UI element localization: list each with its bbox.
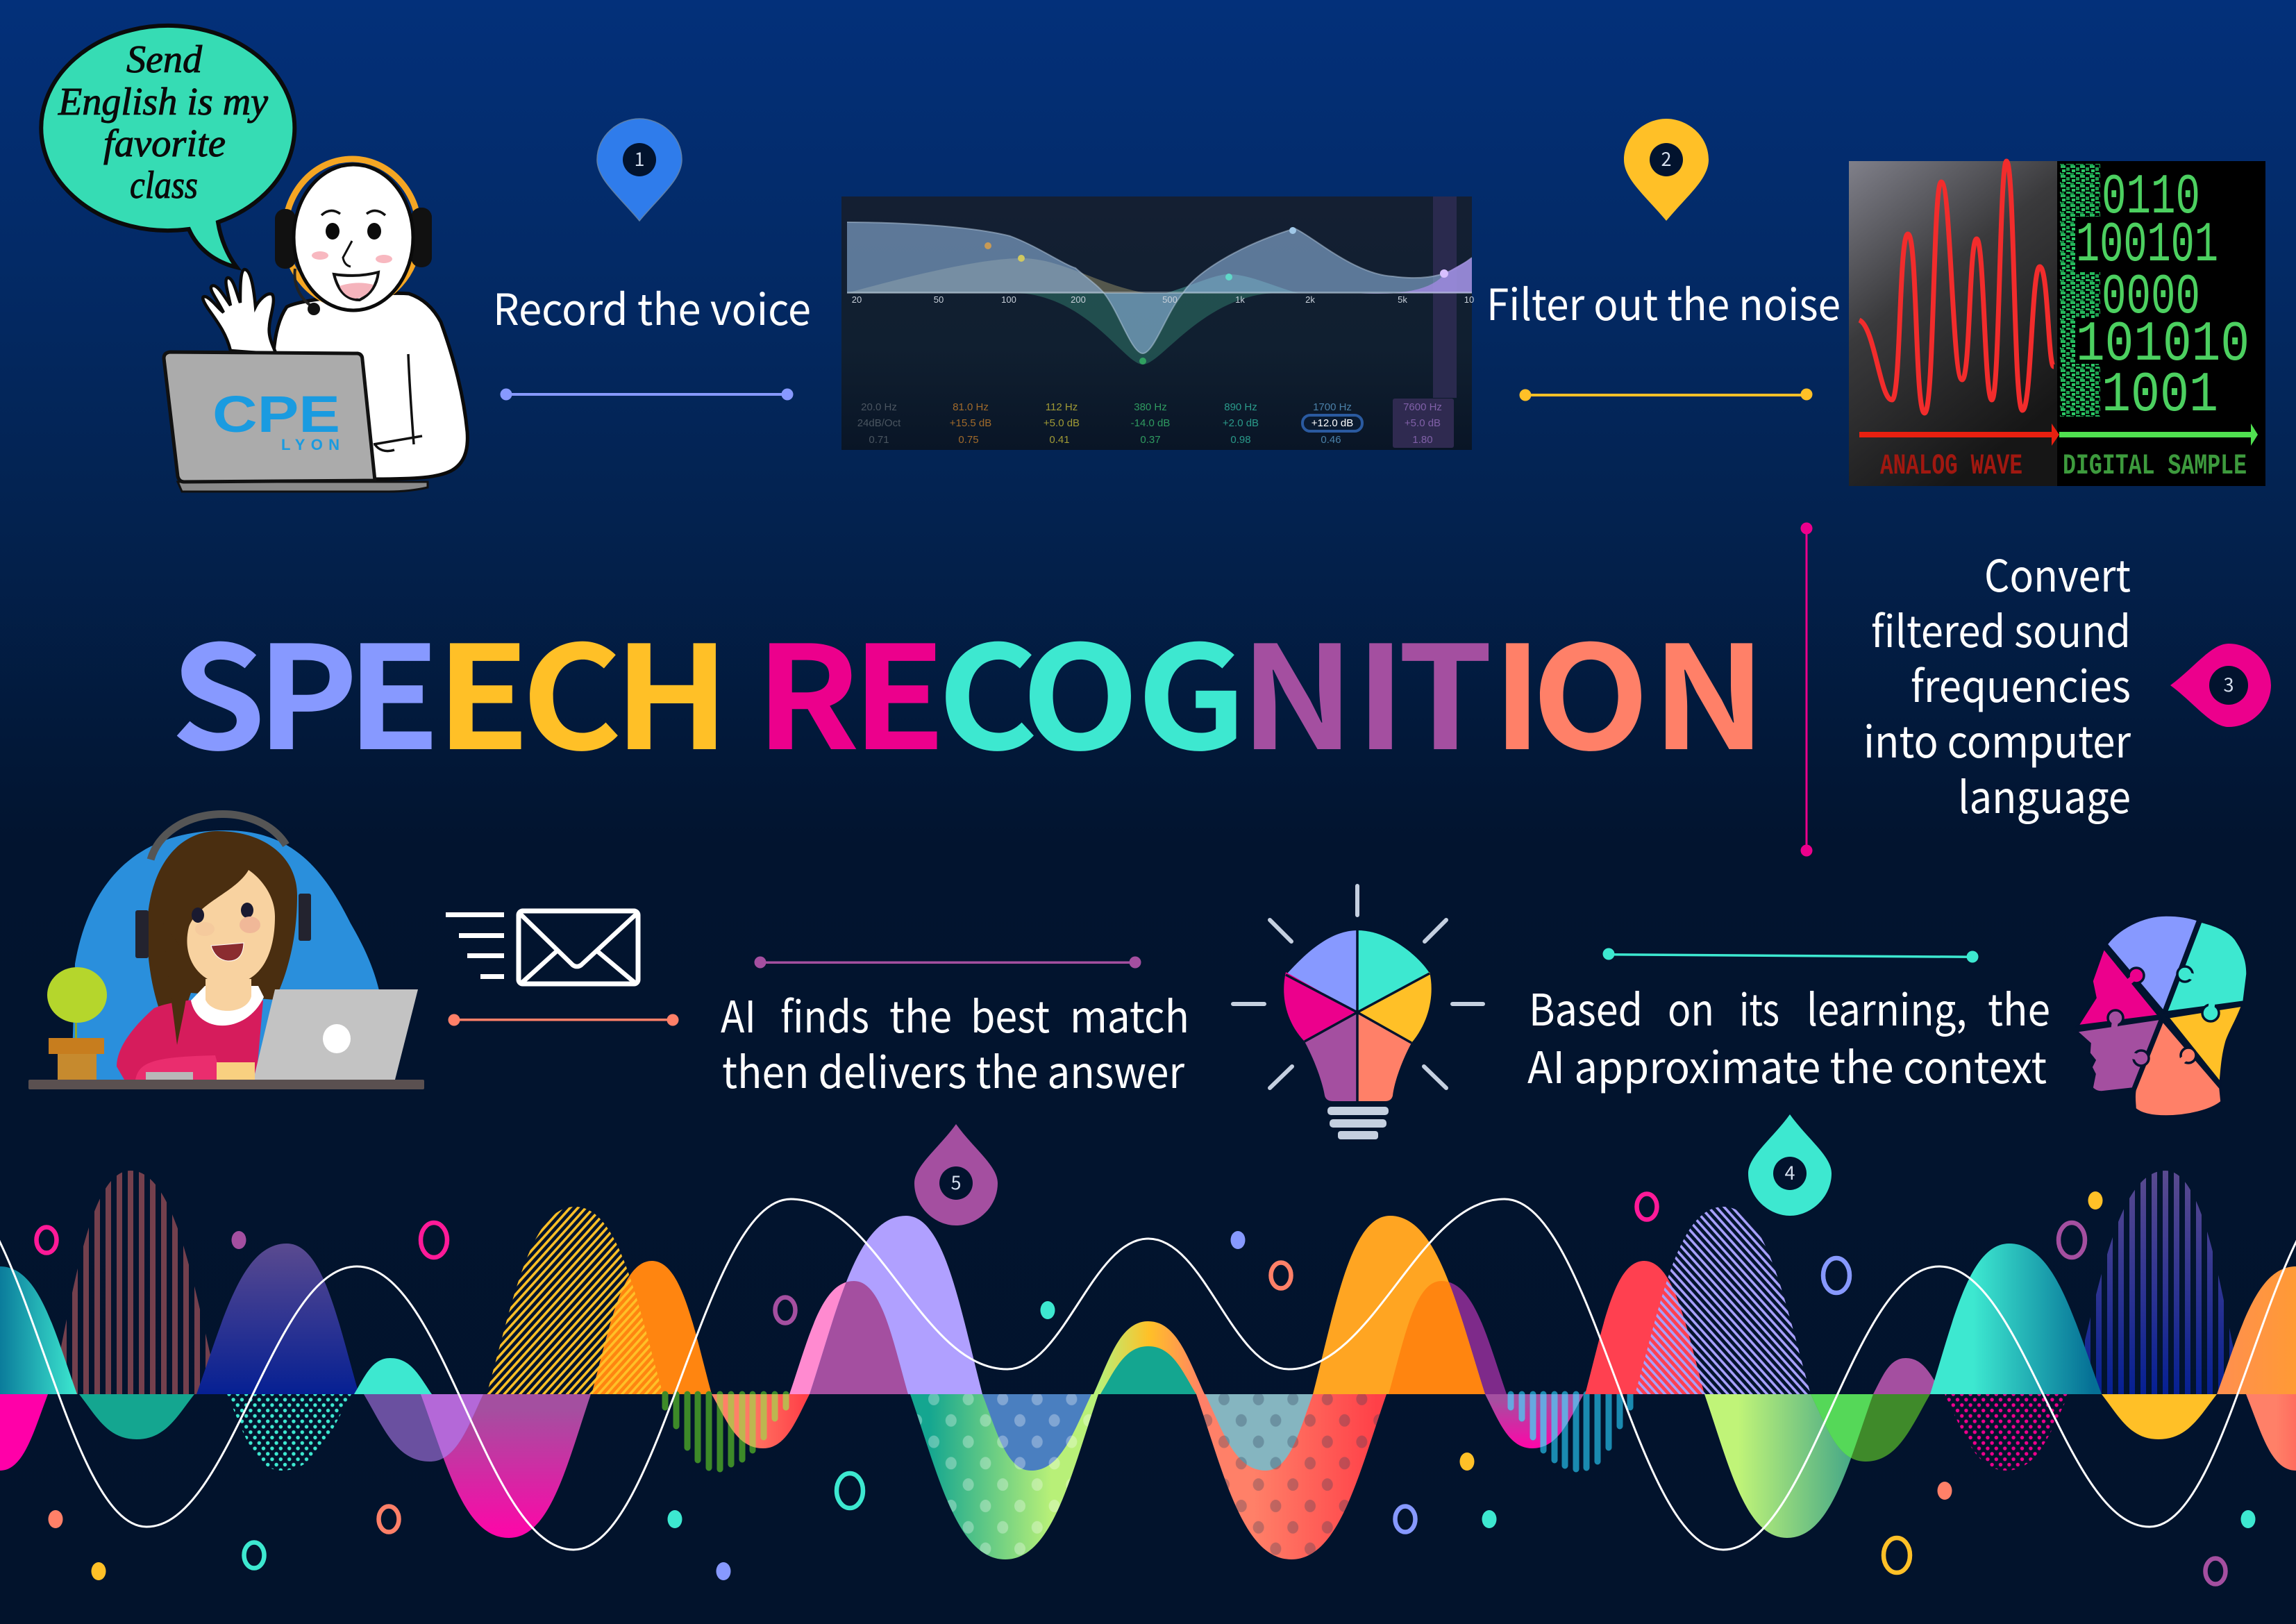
colorful sound wave [0,1171,2296,1559]
step 5 text: AI [721,982,756,1046]
step 3 text: frequencies [1911,652,2131,715]
analog to digital arrows [1859,424,2258,446]
step 3 pin [2170,644,2271,727]
binary digits: 101010 [2076,312,2249,377]
white sine line [0,1180,2296,1550]
equalizer band table: 0.46 [1321,434,1341,446]
wave shapes, right section [1585,1171,2296,1538]
coral trough with bars [712,1394,810,1448]
equalizer curves [847,222,1472,365]
bars overlap highlight [1508,1394,1579,1447]
panel captions [1880,449,2247,483]
binary digits: 1001 [2102,363,2218,428]
equalizer axis labels: 5k [1398,294,1407,305]
speech bubble: favorite [103,122,226,165]
equalizer axis labels: 20 [852,294,862,305]
equalizer band table: +15.5 dB [950,417,991,429]
equalizer band table: 112 Hz [1046,401,1078,413]
headset band and ear cups [275,159,432,306]
wave shapes, centre left [789,1216,1205,1559]
bulb base [1327,1107,1389,1139]
laptop with logo [164,352,428,492]
neck and collar [191,979,264,1026]
red analog wave [1859,161,2054,413]
equalizer side band [1433,196,1457,398]
speech bubble: English is my [58,81,268,124]
step 1 connector [500,389,793,400]
equalizer band table: 81.0 Hz [953,401,989,413]
icon: multicolor light bulb [1233,886,1483,1139]
step 2 pin: 2 [1661,144,1672,171]
equalizer band table: +5.0 dB [1044,417,1080,429]
equalizer axis labels: 100 [1001,294,1016,305]
equalizer axis labels: 500 [1162,294,1178,305]
panel captions: ANALOG WAVE [1880,449,2022,483]
binary digits: 0110 [2102,165,2200,230]
step 3 text: filtered sound [1871,597,2131,660]
equalizer screenshot [841,196,1474,450]
step 3 text [1863,542,2131,826]
main title: ECH [436,584,730,791]
illustration: girl with headset at laptop [28,814,424,1089]
step 5 text: then delivers the answer [722,1038,1185,1101]
waving hand [203,269,276,354]
equalizer band table: 0.71 [869,434,889,446]
analog gradient side [1849,161,2057,486]
step 5 text [721,982,1189,1101]
vertical blue bars [1511,1394,1630,1469]
hair [147,831,297,1045]
analog to digital image [1849,161,2265,486]
main title: SPE [170,584,441,791]
icon: sent envelope [446,911,638,984]
step 1 label: Record the voice [493,275,811,337]
wave shapes, left section [0,1171,712,1538]
main title: ION [1492,584,1766,791]
binary digits [2076,165,2249,428]
equalizer band table: 380 Hz [1134,401,1167,413]
step 3 text: into computer [1863,708,2131,771]
icon: puzzle head [2076,915,2247,1116]
step 3 pin: 3 [2223,670,2234,697]
equalizer band table: 0.37 [1140,434,1161,446]
step 5 pin: 5 [951,1168,961,1195]
equalizer band table: +5.0 dB [1405,417,1441,429]
equalizer band table: 0.75 [958,434,979,446]
hair strand [163,923,187,1045]
head and face [294,165,413,310]
step 2 connector [1519,389,1812,401]
step 5 small connector [449,1014,679,1026]
equalizer band table: 1700 Hz [1313,401,1352,413]
microphone [294,269,320,315]
step 4 text: the [1988,976,2050,1039]
step 4 text: its [1739,976,1779,1039]
speech bubble [41,26,294,267]
pink sweater [117,998,263,1080]
step 4 connector [1602,948,1979,962]
bulb segments [1286,930,1357,1012]
equalizer band table: +12.0 dB [1312,417,1353,429]
binary digits: 0000 [2102,265,2200,330]
step 4 text: Based [1529,976,1643,1039]
step 5 pin [914,1124,998,1225]
body [274,293,467,479]
hands and keyboard [135,1055,255,1080]
equalizer band table [857,399,1454,448]
equalizer band table: 890 Hz [1224,401,1257,413]
step 4 text: on [1668,976,1714,1039]
desk [28,1080,424,1089]
equalizer axis labels [852,294,1474,305]
laptop with logo: CPE [212,385,340,443]
bulb rays [1233,886,1483,1088]
laptop [253,989,418,1080]
step 4 text: AI approximate the context [1527,1033,2047,1096]
puzzle knob necks [2114,974,2212,1062]
binary digits: 100101 [2076,213,2218,278]
headset arc [151,814,286,860]
decorative floating dots [49,1191,2255,1580]
step 1 pin: 1 [635,144,644,171]
illustration: man with headset at laptop [41,26,467,492]
step 4 text: learning, [1807,976,1967,1039]
ear cups [135,894,311,958]
step 4 pin: 4 [1784,1158,1795,1185]
equalizer band table: -14.0 dB [1131,417,1170,429]
equalizer band table: 1.80 [1412,434,1433,446]
vertical green bars [665,1394,786,1469]
step 4 pin [1748,1114,1832,1216]
equalizer axis labels: 2k [1305,294,1315,305]
speech bubble: class [130,164,198,207]
wave shapes, centre right [1196,1216,1584,1559]
equalizer band table: 0.41 [1049,434,1070,446]
equalizer band table: +2.0 dB [1223,417,1259,429]
equalizer axis labels: 10 [1464,294,1474,305]
laptop with logo: LYON [281,436,340,453]
main title: RE [755,584,946,791]
equalizer axis labels: 1k [1235,294,1245,305]
step 3 divider [1801,522,1812,857]
speech bubble: Send [126,38,203,81]
equalizer band table: 24dB/Oct [857,417,901,429]
step 3 text: language [1958,763,2131,826]
step 5 text: the [889,982,952,1046]
equalizer axis labels: 200 [1071,294,1086,305]
step 2 label: Filter out the noise [1486,270,1841,333]
blue dome [72,830,389,1080]
decorative floating rings [36,1194,2226,1584]
step 2 pin [1624,119,1709,221]
arm line [374,354,422,451]
equalizer axis labels: 50 [934,294,944,305]
main title: NIT [1240,584,1493,791]
step 1 pin [597,119,682,221]
step 4 text [1527,976,2050,1096]
step 5 text: match [1070,982,1189,1046]
plant [47,967,107,1080]
step 3 text: Convert [1984,542,2131,605]
step 5 connector [754,957,1141,968]
equalizer band table: 20.0 Hz [861,401,897,413]
step 5 text: best [971,982,1050,1046]
digital noise blocks [2060,164,2100,417]
main title: COG [937,584,1246,791]
equalizer band table: 7600 Hz [1403,401,1442,413]
step 5 text: finds [780,982,869,1046]
equalizer band table: 0.98 [1230,434,1251,446]
face [187,870,275,985]
